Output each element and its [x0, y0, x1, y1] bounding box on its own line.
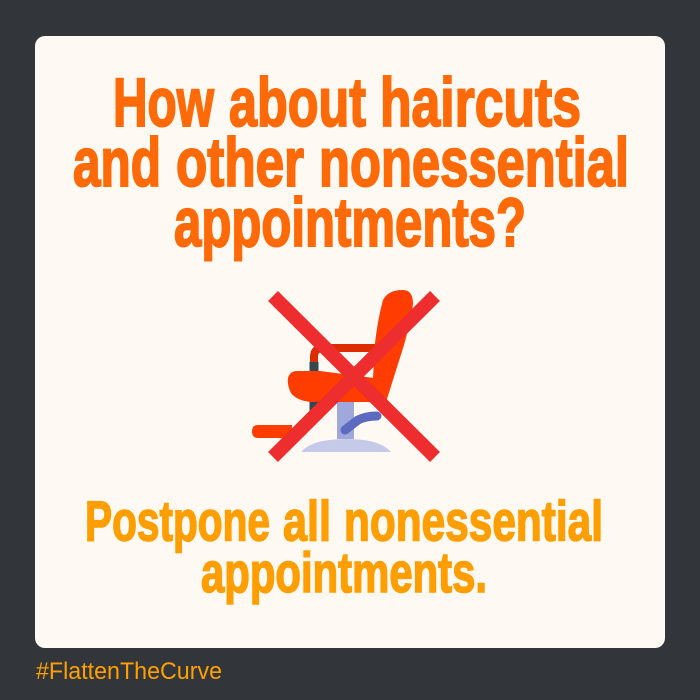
chair armrest support: [310, 362, 318, 412]
chair column: [337, 400, 354, 439]
title: appointments?: [174, 184, 526, 261]
chair seat: [288, 371, 386, 402]
chair armrest: [314, 348, 378, 362]
subheading: Postpone: [85, 490, 270, 554]
hashtag: #FlattenTheCurve: [36, 658, 222, 685]
title: other: [176, 124, 304, 201]
chair footrest: [252, 425, 292, 438]
title: about: [229, 64, 366, 141]
title: How: [113, 64, 214, 141]
panel: main card: [35, 36, 665, 648]
title: [73, 64, 629, 261]
red cross: [273, 296, 435, 457]
subheading: appointments.: [201, 541, 487, 605]
chair base: [301, 439, 391, 452]
chair back: [370, 290, 413, 402]
subheading: nonessential: [344, 490, 603, 554]
subheading: [85, 490, 603, 605]
chair pedal: [345, 416, 377, 430]
title: and: [73, 124, 161, 201]
title: haircuts: [380, 64, 581, 141]
icon: crossed-out barber chair: [252, 290, 435, 457]
subheading: all: [283, 490, 331, 554]
